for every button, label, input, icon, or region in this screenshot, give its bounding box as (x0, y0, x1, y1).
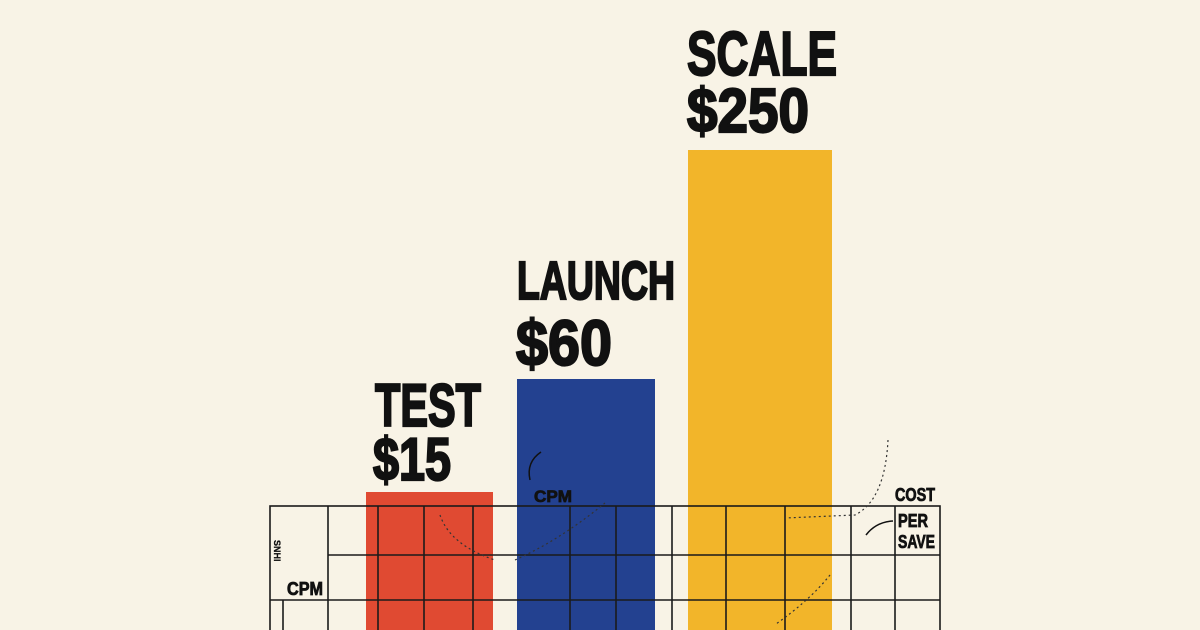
grid table (270, 506, 940, 630)
label: test: TEST (375, 372, 481, 439)
bar: launch (517, 379, 655, 630)
bar: scale (688, 150, 832, 630)
label: launch (516, 251, 675, 379)
label: cpm on launch bar: CPM (534, 487, 572, 506)
label: cpm left: CPM (287, 579, 323, 599)
label: cost per save: COST (895, 485, 935, 505)
label: cost per save: SAVE (898, 532, 935, 552)
label: scale (687, 20, 837, 146)
label: scale: SCALE (687, 20, 837, 89)
bar: test (366, 492, 493, 630)
label: launch: $60 (516, 307, 612, 379)
label: scale: $250 (687, 77, 809, 146)
arrows: solid small (529, 452, 893, 535)
label: launch: LAUNCH (517, 251, 675, 311)
arrows: dotted (440, 440, 888, 624)
label: test: $15 (373, 426, 451, 493)
label: cost per save: PER (898, 511, 928, 531)
label: rotated small: SNHI (272, 540, 282, 562)
label: test (373, 372, 481, 493)
label: cost per save (895, 485, 935, 552)
